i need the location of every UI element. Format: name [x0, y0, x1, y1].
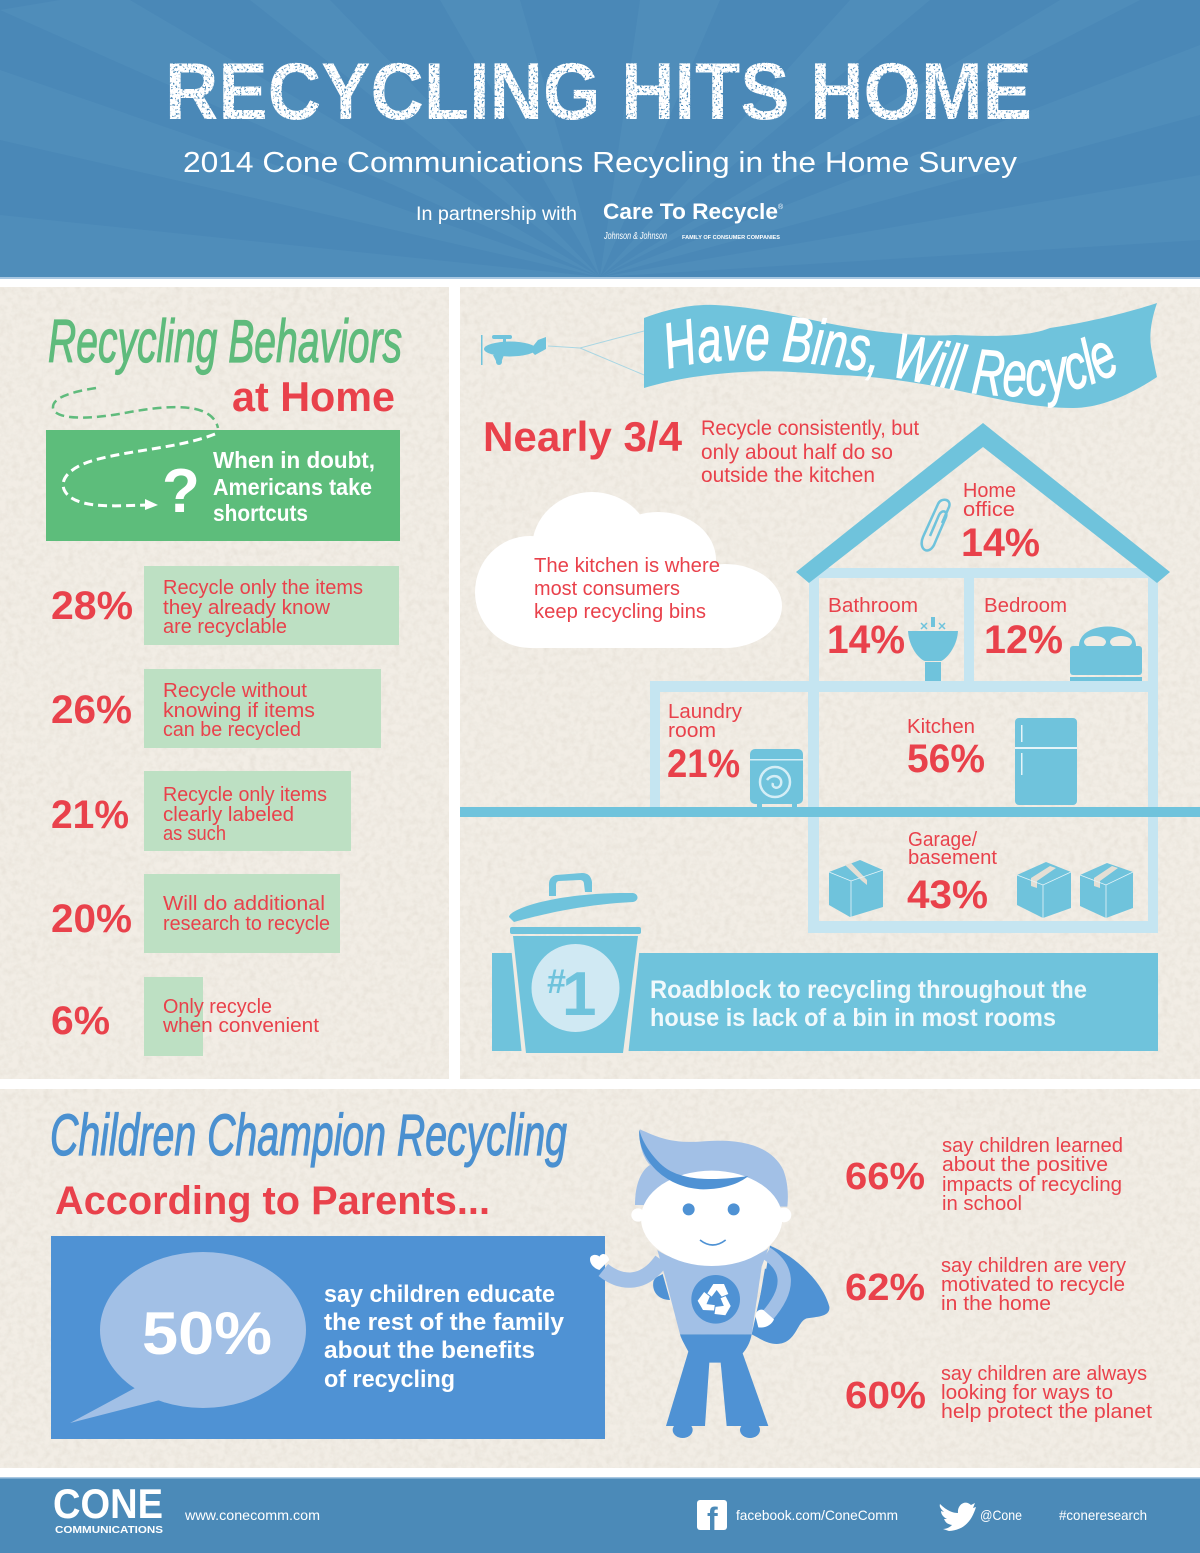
room: home office: Home — [963, 480, 1016, 502]
stat: 60%: 60% — [845, 1375, 926, 1417]
room: bedroom — [984, 595, 1142, 681]
stat: 66%: 66% — [845, 1156, 925, 1198]
panel: have bins, will recycle — [460, 287, 1200, 1079]
room: kitchen — [907, 716, 1077, 805]
banner: Have Bins, Will Recycle — [666, 316, 1116, 408]
icon: box — [1080, 863, 1133, 918]
callout: number one roadblock: Roadblock to recycling throughout the — [650, 976, 1087, 1004]
stat: 60%: say children are always — [941, 1363, 1147, 1385]
partner logo: Care To Recycle — [603, 199, 778, 224]
facebook handle: facebook.com/ConeComm — [736, 1507, 898, 1523]
tow lines — [548, 331, 644, 375]
heading: recycling behaviors: Recycling Behaviors — [48, 308, 402, 375]
stat row: 26%: can be recycled — [163, 719, 301, 741]
subtitle: 2014 Cone Communications Recycling in the Home Survey — [183, 147, 1018, 179]
icon: bed — [1070, 626, 1142, 681]
logo: cone communications: COMMUNICATIONS — [55, 1525, 163, 1536]
stat row: 26%: 26% — [51, 688, 132, 732]
stat: 66%: in school — [942, 1193, 1022, 1215]
room: garage — [829, 829, 1133, 918]
stat row: 20%: 20% — [51, 897, 132, 941]
stat: 66%: say children learned — [942, 1135, 1123, 1157]
callout: 50% — [51, 1236, 605, 1439]
callout: when in doubt: ? — [162, 457, 200, 526]
room: garage: basement — [908, 847, 997, 869]
header band — [0, 0, 1200, 279]
stat row: 28%: are recyclable — [163, 616, 287, 638]
callout: 50%: about the benefits — [324, 1337, 535, 1364]
twitter handle: @Cone — [980, 1507, 1022, 1523]
stat: nearly 3/4: Recycle consistently, but — [701, 417, 919, 440]
stat row: 21% — [51, 771, 351, 851]
room: kitchen: 56% — [907, 737, 985, 781]
website: www.conecomm.com — [184, 1507, 320, 1523]
panel: recycling behaviors — [0, 287, 449, 1079]
room: home office: office — [963, 499, 1015, 521]
cloud callout: The kitchen is where — [534, 555, 720, 577]
callout: 50%: the rest of the family — [324, 1309, 565, 1336]
room: bedroom: 12% — [984, 618, 1063, 662]
stat row: 21%: as such — [163, 823, 226, 845]
room: laundry: Laundry — [668, 701, 742, 723]
room: garage: Garage/ — [908, 829, 977, 851]
stat: nearly 3/4: outside the kitchen — [701, 464, 875, 487]
icon: box — [829, 860, 883, 917]
heading: children champion recycling: Children Champion Recycling — [50, 1103, 567, 1168]
stat: nearly 3/4 — [483, 413, 919, 487]
stat: 62%: motivated to recycle — [941, 1274, 1125, 1296]
icon: trash can — [509, 873, 641, 1056]
stat: nearly 3/4: only about half do so — [701, 441, 893, 464]
speech bubble — [70, 1252, 306, 1423]
cloud callout — [475, 492, 782, 648]
stat row: 26%: Recycle without — [163, 680, 307, 702]
stat row: 28%: Recycle only the items — [163, 577, 363, 599]
icon: trash can: # — [547, 963, 566, 1001]
icon: paperclip — [922, 500, 950, 550]
callout: 50%: say children educate — [324, 1281, 555, 1308]
room: laundry: room — [668, 720, 716, 742]
callout: when in doubt: Americans take — [213, 474, 372, 500]
stat row: 28%: 28% — [51, 584, 133, 628]
house frame — [460, 423, 1200, 933]
partner logo: Johnson & Johnson — [603, 231, 667, 242]
room: laundry: 21% — [667, 742, 740, 786]
icon: twitter — [940, 1503, 976, 1531]
footer — [0, 1477, 1200, 1553]
icon: sink — [908, 617, 958, 681]
room: home office — [922, 480, 1040, 565]
stat row: 28%: they already know — [163, 597, 331, 619]
hashtag: #coneresearch — [1059, 1507, 1147, 1523]
stat: 60%: help protect the planet — [941, 1401, 1152, 1423]
partner logo: ® — [778, 203, 784, 211]
stat row: 21%: clearly labeled — [163, 804, 294, 826]
room: home office: 14% — [961, 521, 1040, 565]
room: bedroom: Bedroom — [984, 595, 1067, 617]
callout: when in doubt — [46, 388, 400, 541]
icon: airplane — [481, 335, 546, 365]
callout: number one roadblock: house is lack of a bin in most rooms — [650, 1004, 1056, 1032]
stat row: 26%: knowing if items — [163, 700, 315, 722]
stat row: 21%: 21% — [51, 793, 129, 837]
stat: 62% — [845, 1255, 1126, 1315]
panel: children champion recycling — [0, 1089, 1200, 1468]
title: RECYCLING HITS HOME — [165, 47, 1032, 137]
illustration: superhero boy — [590, 1129, 829, 1438]
stat row: 26% — [51, 669, 381, 748]
stat row: 20% — [51, 874, 340, 953]
stat row: 6%: Only recycle — [163, 996, 272, 1018]
stat: nearly 3/4: Nearly 3/4 — [483, 413, 683, 460]
partnership line: In partnership with — [416, 204, 577, 225]
stat row: 28% — [51, 566, 399, 645]
stat row: 6% — [51, 977, 319, 1056]
stat: 66% — [845, 1135, 1123, 1215]
stat: 62%: in the home — [941, 1293, 1051, 1315]
cloud callout: most consumers — [534, 578, 680, 600]
callout: when in doubt: shortcuts — [213, 500, 308, 526]
stat row: 20%: research to recycle — [163, 913, 330, 935]
partner logo — [603, 199, 784, 242]
stat: 66%: impacts of recycling — [942, 1174, 1122, 1196]
callout: when in doubt: When in doubt, — [213, 447, 375, 473]
stat row: 6%: when convenient — [162, 1015, 319, 1037]
stat row: 20%: Will do additional — [163, 893, 325, 915]
icon: box — [1017, 862, 1071, 918]
stat: 60% — [845, 1363, 1152, 1423]
room: bathroom — [827, 595, 958, 681]
room: kitchen: Kitchen — [907, 716, 975, 738]
room: garage: 43% — [907, 873, 988, 917]
callout: number one roadblock — [492, 873, 1158, 1056]
stat: 62%: 62% — [845, 1267, 925, 1309]
icon: facebook: f — [707, 1501, 718, 1537]
icon: trash can: 1 — [562, 960, 596, 1029]
cloud callout: keep recycling bins — [534, 601, 706, 623]
icon: fridge — [1015, 718, 1077, 805]
room: bathroom: 14% — [827, 618, 905, 662]
icon: washer — [750, 749, 803, 808]
partner logo: FAMILY OF CONSUMER COMPANIES — [682, 235, 781, 241]
stat: 66%: about the positive — [942, 1154, 1108, 1176]
icon: facebook — [697, 1500, 727, 1537]
callout: 50%: of recycling — [324, 1366, 455, 1393]
room: laundry — [667, 701, 803, 808]
logo: cone communications: CONE — [53, 1480, 163, 1527]
stat: 62%: say children are very — [941, 1255, 1126, 1277]
callout: 50%: 50% — [142, 1300, 272, 1367]
room: bathroom: Bathroom — [828, 595, 918, 617]
heading: according to parents: According to Parents... — [55, 1179, 490, 1223]
stat row: 6%: 6% — [51, 999, 110, 1043]
stat row: 21%: Recycle only items — [163, 784, 327, 806]
heading: at home: at Home — [232, 373, 395, 420]
stat: 60%: looking for ways to — [941, 1382, 1113, 1404]
